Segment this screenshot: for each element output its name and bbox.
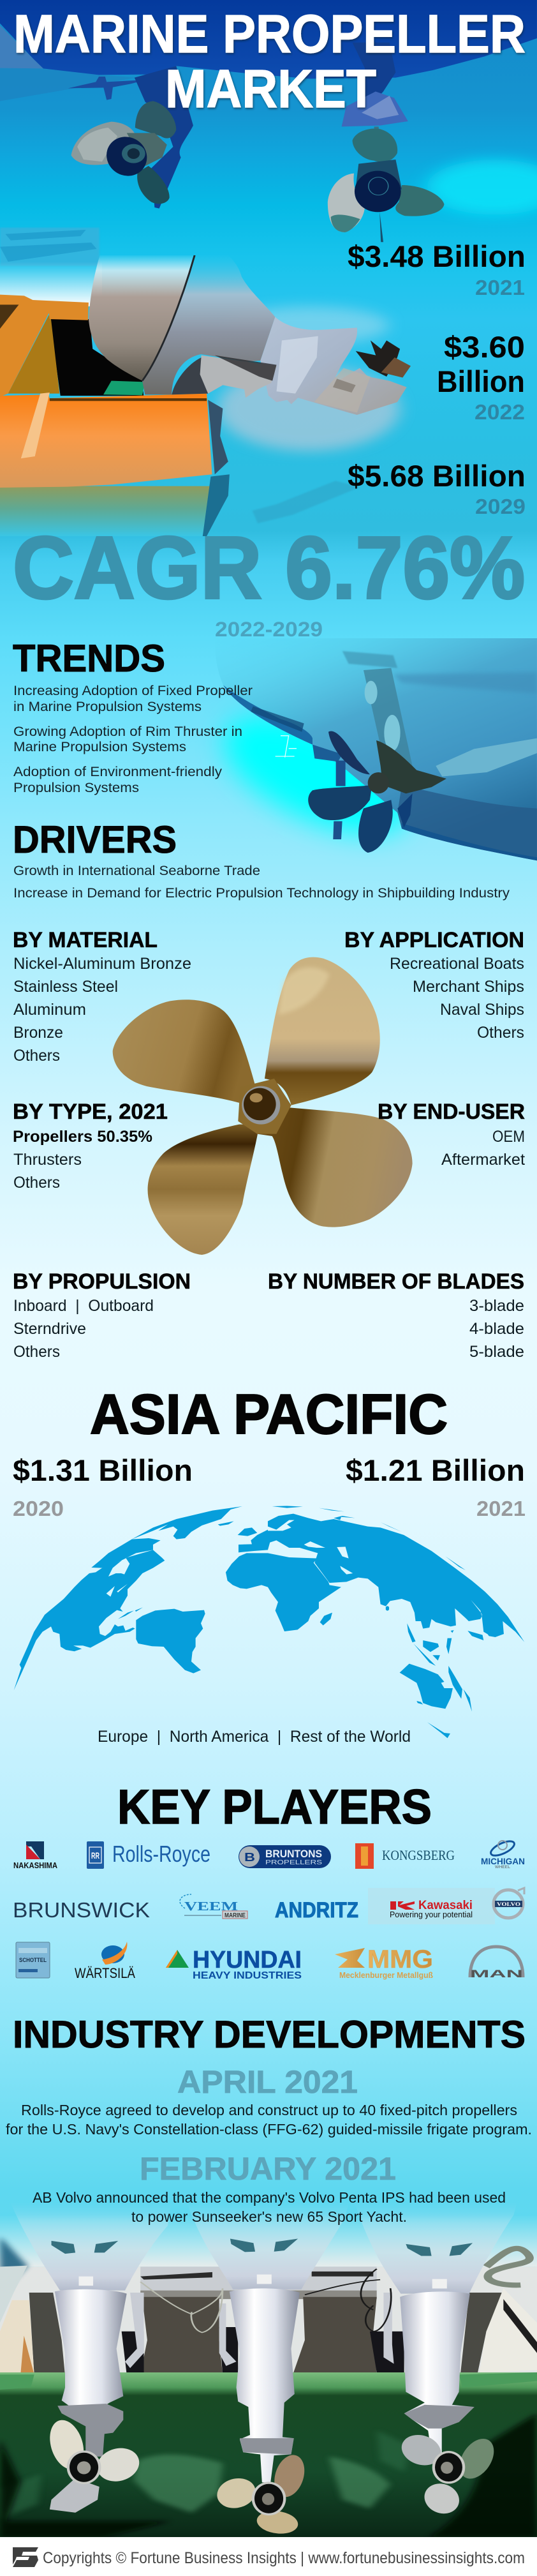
icon: Fortune Business Insights logo xyxy=(13,2547,38,2567)
development: April 2021: Rolls-Royce agreed to develop and construct up to 40 fixed-pitch propellers xyxy=(21,2102,517,2118)
drivers: DRIVERS xyxy=(13,818,177,861)
regional values: 2021 xyxy=(476,1497,526,1520)
segment: by type xyxy=(13,1100,168,1192)
logo: Veem Marine: MARINE xyxy=(224,1912,246,1919)
logo: Wärtsilä xyxy=(75,1942,135,1981)
segment: by end-user: OEM xyxy=(492,1128,525,1146)
logo: Andritz: ANDRITZ xyxy=(275,1898,358,1922)
logo: Veem Marine xyxy=(180,1894,247,1919)
segment: by application: Naval Ships xyxy=(440,1001,524,1019)
segment: by propulsion: Sterndrive xyxy=(13,1320,86,1338)
regional values: 2020 xyxy=(13,1497,64,1520)
segment: by material: Aluminum xyxy=(13,1001,86,1019)
CAGR figure: 2022-2029 xyxy=(215,618,323,641)
development: April 2021 xyxy=(6,2064,532,2138)
Australia and New Zealand xyxy=(400,1664,453,1738)
segment: by material xyxy=(13,928,191,1065)
logo: MAN xyxy=(470,1947,523,1980)
development: April 2021: for the U.S. Navy's Constellation-class (FFG-62) guided-missile frigate program. xyxy=(6,2121,532,2138)
footer xyxy=(0,2537,537,2576)
segment: by propulsion: Inboard | Outboard xyxy=(13,1297,154,1315)
key players heading: KEY PLAYERS xyxy=(117,1780,432,1834)
logo: Michigan Wheel xyxy=(481,1838,525,1869)
logo: Bruntons Propellers: PROPELLERS xyxy=(265,1859,322,1866)
regional values: $1.31 Billion xyxy=(13,1453,193,1487)
CAGR figure: CAGR 6.76% xyxy=(13,519,525,617)
trends xyxy=(13,637,253,795)
trends: Propulsion Systems xyxy=(13,781,139,795)
segment: by propulsion xyxy=(13,1269,191,1361)
segment: by application: Merchant Ships xyxy=(413,978,524,996)
trends: in Marine Propulsion Systems xyxy=(13,700,202,714)
development: February 2021: to power Sunseeker's new 65 Sport Yacht. xyxy=(131,2208,407,2225)
segment: by application xyxy=(344,928,524,1042)
Eurasia xyxy=(239,1514,524,1642)
logo: Nakashima xyxy=(13,1841,58,1870)
logo: Kawasaki: Powering your potential xyxy=(390,1910,473,1919)
logo: Kongsberg: KONGSBERG xyxy=(382,1847,455,1863)
logo: Rolls-Royce: RR xyxy=(91,1850,99,1861)
New Guinea xyxy=(448,1666,472,1712)
market value figures: 2029 xyxy=(475,495,526,518)
logo: MMG: Mecklenburger Metallguß xyxy=(339,1970,433,1980)
photo: ship hull with two propellers xyxy=(0,0,537,242)
North America xyxy=(14,1550,165,1690)
segment: by application: BY APPLICATION xyxy=(344,928,524,952)
trends: Marine Propulsion Systems xyxy=(13,740,186,754)
logo: Rolls-Royce: Rolls-Royce xyxy=(112,1841,210,1867)
segment: by material: Others xyxy=(13,1047,60,1065)
logo: Hyundai Heavy Industries xyxy=(166,1947,302,1981)
drivers xyxy=(13,818,510,901)
development: February 2021 xyxy=(33,2151,506,2225)
segment: by application: Recreational Boats xyxy=(390,955,524,973)
Greenland and Iceland xyxy=(132,1506,242,1539)
segment: by type: Propellers 50.35% xyxy=(13,1128,152,1146)
logo: Kawasaki: Kawasaki xyxy=(418,1899,473,1912)
Africa xyxy=(226,1553,341,1631)
trends: TRENDS xyxy=(13,637,165,680)
market value figures xyxy=(348,239,526,518)
logo: Bruntons Propellers: B xyxy=(244,1851,255,1864)
logo: Michigan Wheel: WHEEL xyxy=(495,1866,511,1869)
title: MARKET xyxy=(165,59,376,119)
logo: Brunswick: BRUNSWICK xyxy=(13,1898,150,1922)
segment: by end-user: Aftermarket xyxy=(441,1151,525,1169)
logo: Kawasaki xyxy=(368,1888,495,1924)
South America xyxy=(136,1609,205,1674)
boat hull xyxy=(0,394,212,488)
logo: Wärtsilä: WÄRTSILÄ xyxy=(75,1965,135,1981)
segment: by end-user xyxy=(378,1100,525,1169)
segment: by number of blades xyxy=(268,1269,524,1361)
drivers: Growth in International Seaborne Trade xyxy=(13,864,260,878)
logo: MMG: MMG xyxy=(367,1945,433,1973)
regions legend: Europe | North America | Rest of the World xyxy=(98,1728,411,1746)
Arctic islands xyxy=(272,1506,466,1570)
title xyxy=(13,4,526,119)
UK xyxy=(238,1527,257,1536)
logo: Bruntons Propellers xyxy=(239,1845,331,1868)
Asia islands xyxy=(386,1606,504,1666)
market value figures: Billion xyxy=(437,364,525,398)
trends: Growing Adoption of Rim Thruster in xyxy=(13,724,242,739)
logo: Rolls-Royce xyxy=(87,1841,210,1869)
logo: Volvo: VOLVO xyxy=(497,1901,520,1907)
drivers: Increase in Demand for Electric Propulsion Technology in Shipbuilding Industry xyxy=(13,886,510,901)
segment: by number of blades: BY NUMBER OF BLADES xyxy=(268,1269,524,1294)
segment: by number of blades: 3-blade xyxy=(469,1297,524,1315)
trends: Adoption of Environment-friendly xyxy=(13,765,223,779)
logo: Kongsberg xyxy=(355,1843,455,1869)
logo: Veem Marine: VEEM xyxy=(184,1899,238,1913)
segment: by end-user: BY END-USER xyxy=(378,1100,525,1124)
logo: Michigan Wheel: MICHIGAN xyxy=(481,1856,525,1866)
photo: three outboard engines over green water xyxy=(0,2202,537,2538)
propeller left xyxy=(71,101,176,204)
segment: by number of blades: 5-blade xyxy=(469,1343,524,1361)
segment: by type: Others xyxy=(13,1174,60,1192)
regional values xyxy=(13,1453,526,1520)
logo: Schottel: SCHOTTEL xyxy=(19,1957,47,1963)
boat interior xyxy=(50,319,143,396)
trends: Increasing Adoption of Fixed Propeller xyxy=(13,684,253,698)
segment: by type: Thrusters xyxy=(13,1151,82,1169)
segment: by propulsion: BY PROPULSION xyxy=(13,1269,191,1294)
left engine xyxy=(10,2202,171,2513)
segment: by material: Stainless Steel xyxy=(13,978,118,996)
segment: by application: Others xyxy=(477,1024,524,1042)
Caribbean xyxy=(118,1607,143,1619)
logo: Bruntons Propellers: BRUNTONS xyxy=(265,1848,322,1860)
segment: by material: BY MATERIAL xyxy=(13,928,158,952)
photo: outboard motor on orange boat xyxy=(0,228,411,536)
logo: Schottel xyxy=(16,1942,50,1978)
right engine xyxy=(355,2202,517,2515)
engine cowl xyxy=(142,255,275,394)
photo: ship hull and propeller behind trends xyxy=(207,638,537,860)
development: April 2021: APRIL 2021 xyxy=(177,2064,358,2100)
propeller right xyxy=(328,128,445,242)
regional values: $1.21 Billion xyxy=(346,1453,525,1487)
development: February 2021: FEBRUARY 2021 xyxy=(140,2151,396,2187)
market value figures: 2021 xyxy=(475,276,525,299)
segment: by number of blades: 4-blade xyxy=(469,1320,524,1338)
logo: MAN: MAN xyxy=(470,1968,523,1980)
segment: by material: Bronze xyxy=(13,1024,63,1042)
middle engine xyxy=(187,2202,349,2538)
logo: Nakashima: NAKASHIMA xyxy=(13,1861,58,1870)
logo: Hyundai Heavy Industries: HYUNDAI xyxy=(193,1947,302,1973)
small propeller xyxy=(356,340,400,377)
market value figures: $3.60 xyxy=(444,330,525,364)
Arctic archipelago xyxy=(91,1538,161,1568)
logo: Volvo xyxy=(494,1888,524,1918)
market value figures: 2022 xyxy=(474,400,525,424)
segment: by type: BY TYPE, 2021 xyxy=(13,1100,168,1124)
world map xyxy=(14,1506,524,1738)
development: February 2021: AB Volvo announced that the company's Volvo Penta IPS had been used xyxy=(33,2189,506,2206)
market value figures: $5.68 Billion xyxy=(348,459,526,493)
regional heading: Asia Pacific: ASIA PACIFIC xyxy=(90,1382,448,1446)
industry developments heading: INDUSTRY DEVELOPMENTS xyxy=(13,2013,526,2056)
market value figures: $3.48 Billion xyxy=(348,239,526,273)
logo: MMG xyxy=(335,1945,433,1980)
logo: Hyundai Heavy Industries: HEAVY INDUSTRIES xyxy=(193,1970,302,1981)
icon: bronze four-blade propeller xyxy=(113,957,413,1255)
segment: by material: Nickel-Aluminum Bronze xyxy=(13,955,191,973)
segment: by propulsion: Others xyxy=(13,1343,60,1361)
